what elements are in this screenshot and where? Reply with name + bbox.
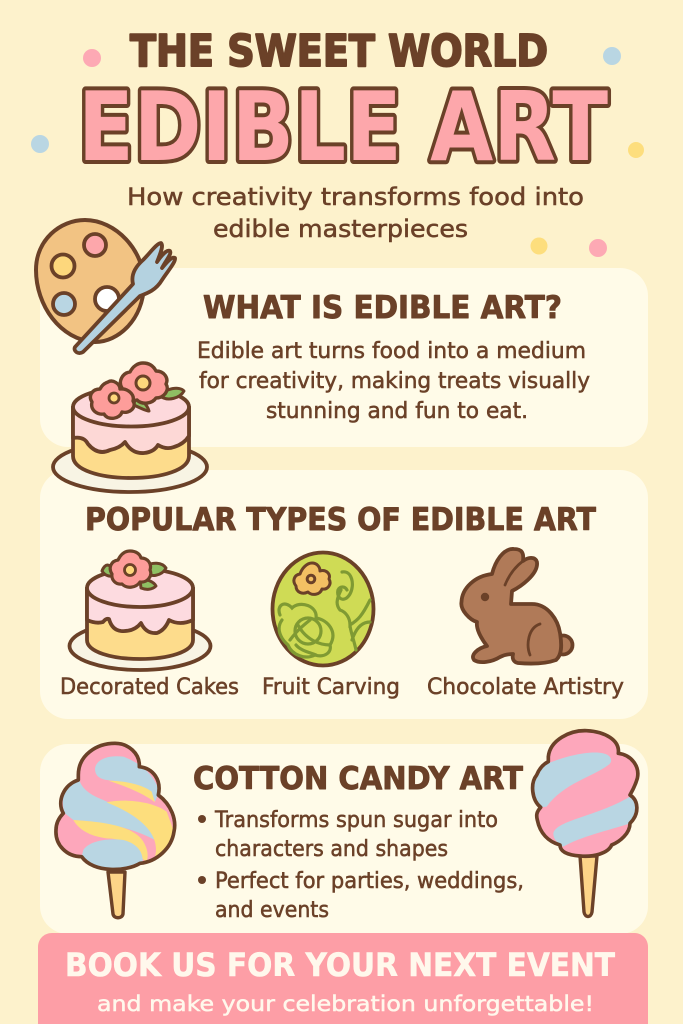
panel: cotton candy art bbox=[40, 744, 648, 934]
subtitle: How creativity transforms food into bbox=[127, 183, 584, 211]
icon: chocolate bunny bbox=[461, 549, 572, 664]
decorative confetti dots bbox=[31, 47, 644, 257]
subtitle bbox=[127, 183, 584, 243]
bullet list: cotton candy: and events bbox=[215, 897, 329, 923]
bullet list: cotton candy: Transforms spun sugar into bbox=[214, 807, 498, 833]
title: edible art: EDIBLE ART bbox=[78, 73, 608, 183]
bullet list: cotton candy: Perfect for parties, weddings, bbox=[215, 868, 524, 894]
heading: what is edible art: WHAT IS EDIBLE ART? bbox=[203, 290, 562, 326]
labels: popular types: Fruit Carving bbox=[262, 675, 400, 700]
labels: popular types bbox=[60, 675, 624, 700]
text: what is edible art description: Edible art turns food into a medium bbox=[197, 338, 586, 364]
icon: paint palette with fork bbox=[36, 220, 175, 353]
panel: what is edible art bbox=[40, 268, 648, 447]
text: what is edible art description bbox=[197, 338, 590, 424]
call to action banner bbox=[38, 933, 648, 1024]
bullet list: cotton candy: characters and shapes bbox=[215, 836, 448, 862]
panel: popular types bbox=[40, 470, 648, 719]
call to action banner: BOOK US FOR YOUR NEXT EVENT bbox=[65, 946, 615, 984]
icon: decorated cake large bbox=[53, 363, 207, 492]
subtitle: edible masterpieces bbox=[213, 215, 468, 243]
bullet list: cotton candy bbox=[198, 807, 524, 923]
labels: popular types: Chocolate Artistry bbox=[427, 675, 624, 700]
heading: cotton candy art: COTTON CANDY ART bbox=[193, 761, 523, 797]
call to action banner: and make your celebration unforgettable! bbox=[97, 992, 594, 1016]
icon: carved fruit bbox=[272, 552, 374, 666]
icon: decorated cake small bbox=[70, 551, 210, 670]
labels: popular types: Decorated Cakes bbox=[60, 675, 239, 700]
text: what is edible art description: for creativity, making treats visually bbox=[199, 368, 590, 394]
text: what is edible art description: stunning and fun to eat. bbox=[266, 398, 528, 424]
title: the sweet world: THE SWEET WORLD bbox=[130, 26, 548, 77]
heading: popular types: POPULAR TYPES OF EDIBLE ART bbox=[85, 502, 596, 538]
icon: cotton candy left bbox=[56, 743, 175, 918]
icon: cotton candy right bbox=[533, 731, 638, 916]
